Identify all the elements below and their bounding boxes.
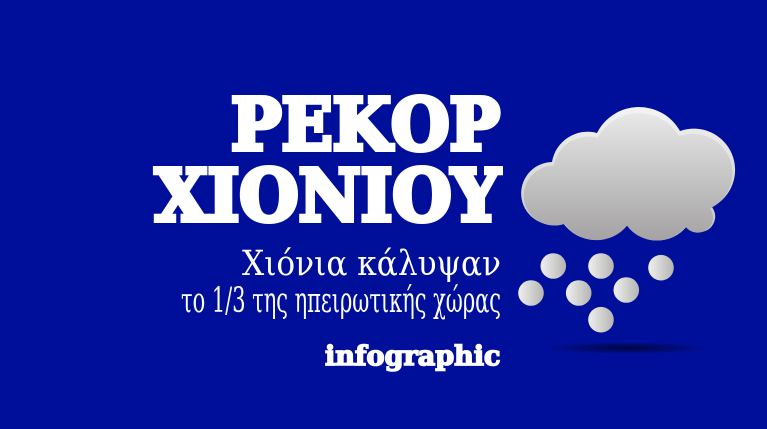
snowballs <box>518 253 674 333</box>
infographic label: infographic <box>325 341 500 372</box>
cloud <box>521 107 735 241</box>
icon: snow cloud <box>518 107 735 355</box>
subtitle: το 1/3 της ηπειρωτικής χώρας <box>181 281 501 321</box>
subtitle <box>181 244 501 321</box>
title <box>155 82 501 238</box>
subtitle: Χιόνια κάλυψαν <box>242 244 501 284</box>
title: ΡΕΚΟΡ <box>231 82 500 166</box>
shadow <box>532 341 722 355</box>
title: ΧΙΟΝΙΟΥ <box>155 154 501 238</box>
